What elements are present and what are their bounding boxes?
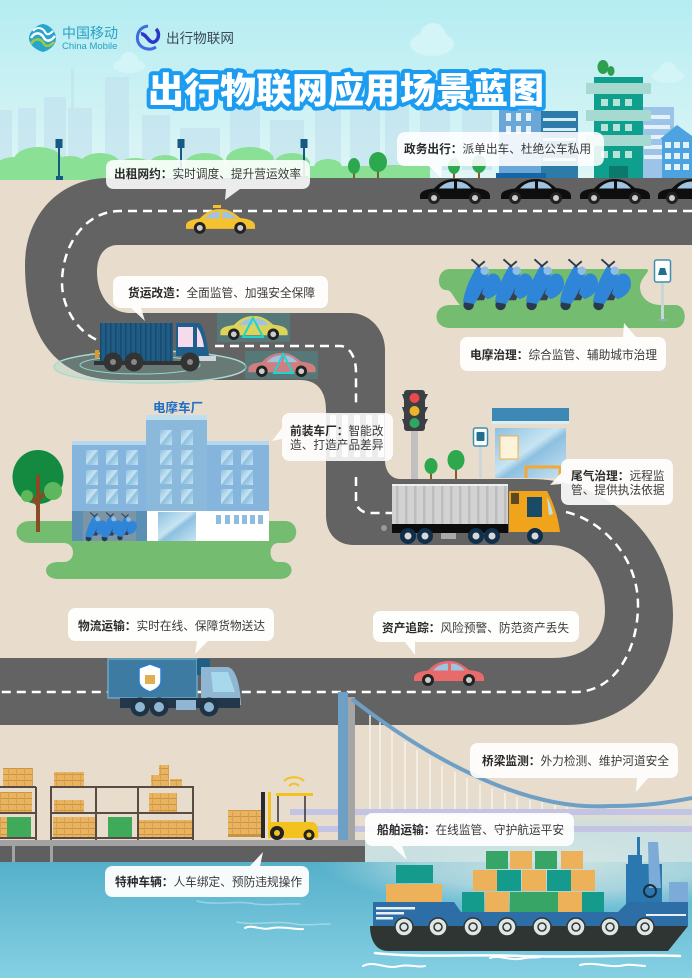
callout: 电摩治理: 电摩治理：综合监管、辅助城市治理 bbox=[470, 348, 657, 362]
factory ground bbox=[16, 521, 296, 579]
black cars row bbox=[420, 179, 692, 204]
ship hull bbox=[370, 902, 688, 951]
ADAS red car bbox=[245, 351, 318, 379]
truck with sensing rings bbox=[54, 323, 246, 383]
water waves bbox=[197, 901, 680, 967]
title: 出行物联网应用场景蓝图 bbox=[148, 70, 544, 111]
red car bbox=[414, 661, 484, 686]
logo: China Mobile bbox=[29, 24, 118, 52]
callout: 物流运输: 物流运输：实时在线、保障货物送达 bbox=[78, 619, 265, 633]
callout: 货运改造 bbox=[113, 276, 328, 321]
bus shelter bbox=[492, 408, 569, 478]
callout: 桥梁监测 bbox=[470, 743, 678, 792]
factory label: 电摩车厂 bbox=[153, 400, 203, 415]
callout: 货运改造: 货运改造：全面监管、加强安全保障 bbox=[128, 286, 315, 300]
road bbox=[0, 178, 692, 725]
factory building bbox=[72, 415, 269, 541]
ADAS yellow car bbox=[217, 313, 290, 342]
callout: 船舶运输: 船舶运输：在线监管、守护航运平安 bbox=[377, 823, 564, 837]
roadside trees bbox=[348, 152, 486, 178]
traffic light bbox=[402, 390, 428, 479]
callout: 尾气治理: 管、提供执法依据 bbox=[571, 483, 665, 497]
logo: China Mobile: China Mobile bbox=[62, 41, 117, 52]
callout: 前装车厂: 前装车厂：智能改 bbox=[290, 424, 384, 438]
warehouse shelves bbox=[0, 765, 194, 840]
callout: 尾气治理: 尾气治理：远程监 bbox=[571, 469, 665, 483]
tree bbox=[12, 450, 64, 532]
bridge bbox=[290, 692, 692, 840]
callout: 出租网约 bbox=[106, 160, 310, 200]
callout: 资产追踪: 资产追踪：风险预警、防范资产丢失 bbox=[382, 621, 569, 635]
callout: 尾气治理 bbox=[550, 459, 673, 505]
dock bbox=[0, 840, 365, 862]
road centre dashes bbox=[0, 211, 692, 692]
callout: 物流运输 bbox=[68, 608, 274, 654]
bus stop sign bbox=[474, 428, 488, 478]
crosswalk bbox=[330, 415, 384, 457]
callout: 政务出行: 政务出行：派单出车、杜绝公车私用 bbox=[404, 142, 591, 156]
ship portholes bbox=[395, 918, 654, 936]
small trees by road bbox=[424, 450, 464, 479]
containers on deck bbox=[386, 851, 604, 912]
logo: 出行物联网 bbox=[128, 26, 234, 49]
cargo ship bbox=[370, 837, 688, 951]
ship superstructure bbox=[626, 837, 688, 912]
callout: 资产追踪 bbox=[373, 611, 579, 655]
callout: 前装车厂: 造、打造产品差异 bbox=[290, 438, 384, 452]
row of electric scooters bbox=[463, 259, 631, 310]
callout: 特种车辆: 特种车辆：人车绑定、预防违规操作 bbox=[115, 875, 302, 889]
street lamps bbox=[56, 139, 308, 180]
clouds bbox=[113, 23, 684, 83]
distant city skyline bbox=[0, 68, 492, 170]
callout: 前装车厂 bbox=[272, 413, 393, 461]
scooter parking sign bbox=[654, 260, 670, 321]
callout: 出租网约: 出租网约：实时调度、提升营运效率 bbox=[114, 167, 301, 181]
callout: 桥梁监测: 桥梁监测：外力检测、维护河道安全 bbox=[482, 754, 669, 768]
logistics truck bbox=[108, 659, 241, 716]
callout: 政务出行 bbox=[397, 132, 604, 178]
background ground bbox=[0, 178, 692, 868]
grey container truck bbox=[381, 484, 560, 544]
callout: 电摩治理 bbox=[460, 323, 666, 371]
sea bbox=[0, 862, 692, 978]
forklift with box bbox=[228, 777, 318, 840]
pale glow on water behind ship bbox=[320, 812, 692, 912]
background sky bbox=[0, 0, 692, 180]
logo: China Mobile: 中国移动 bbox=[62, 25, 118, 41]
logo: 出行物联网: 出行物联网 bbox=[166, 31, 234, 46]
parking green area bbox=[436, 269, 685, 328]
callout: 船舶运输 bbox=[365, 813, 574, 860]
callout: 特种车辆 bbox=[105, 852, 309, 897]
bushes strip bbox=[0, 147, 430, 180]
buildings cluster bbox=[496, 60, 692, 179]
taxi bbox=[186, 205, 255, 234]
fade behind ship bbox=[365, 795, 692, 862]
